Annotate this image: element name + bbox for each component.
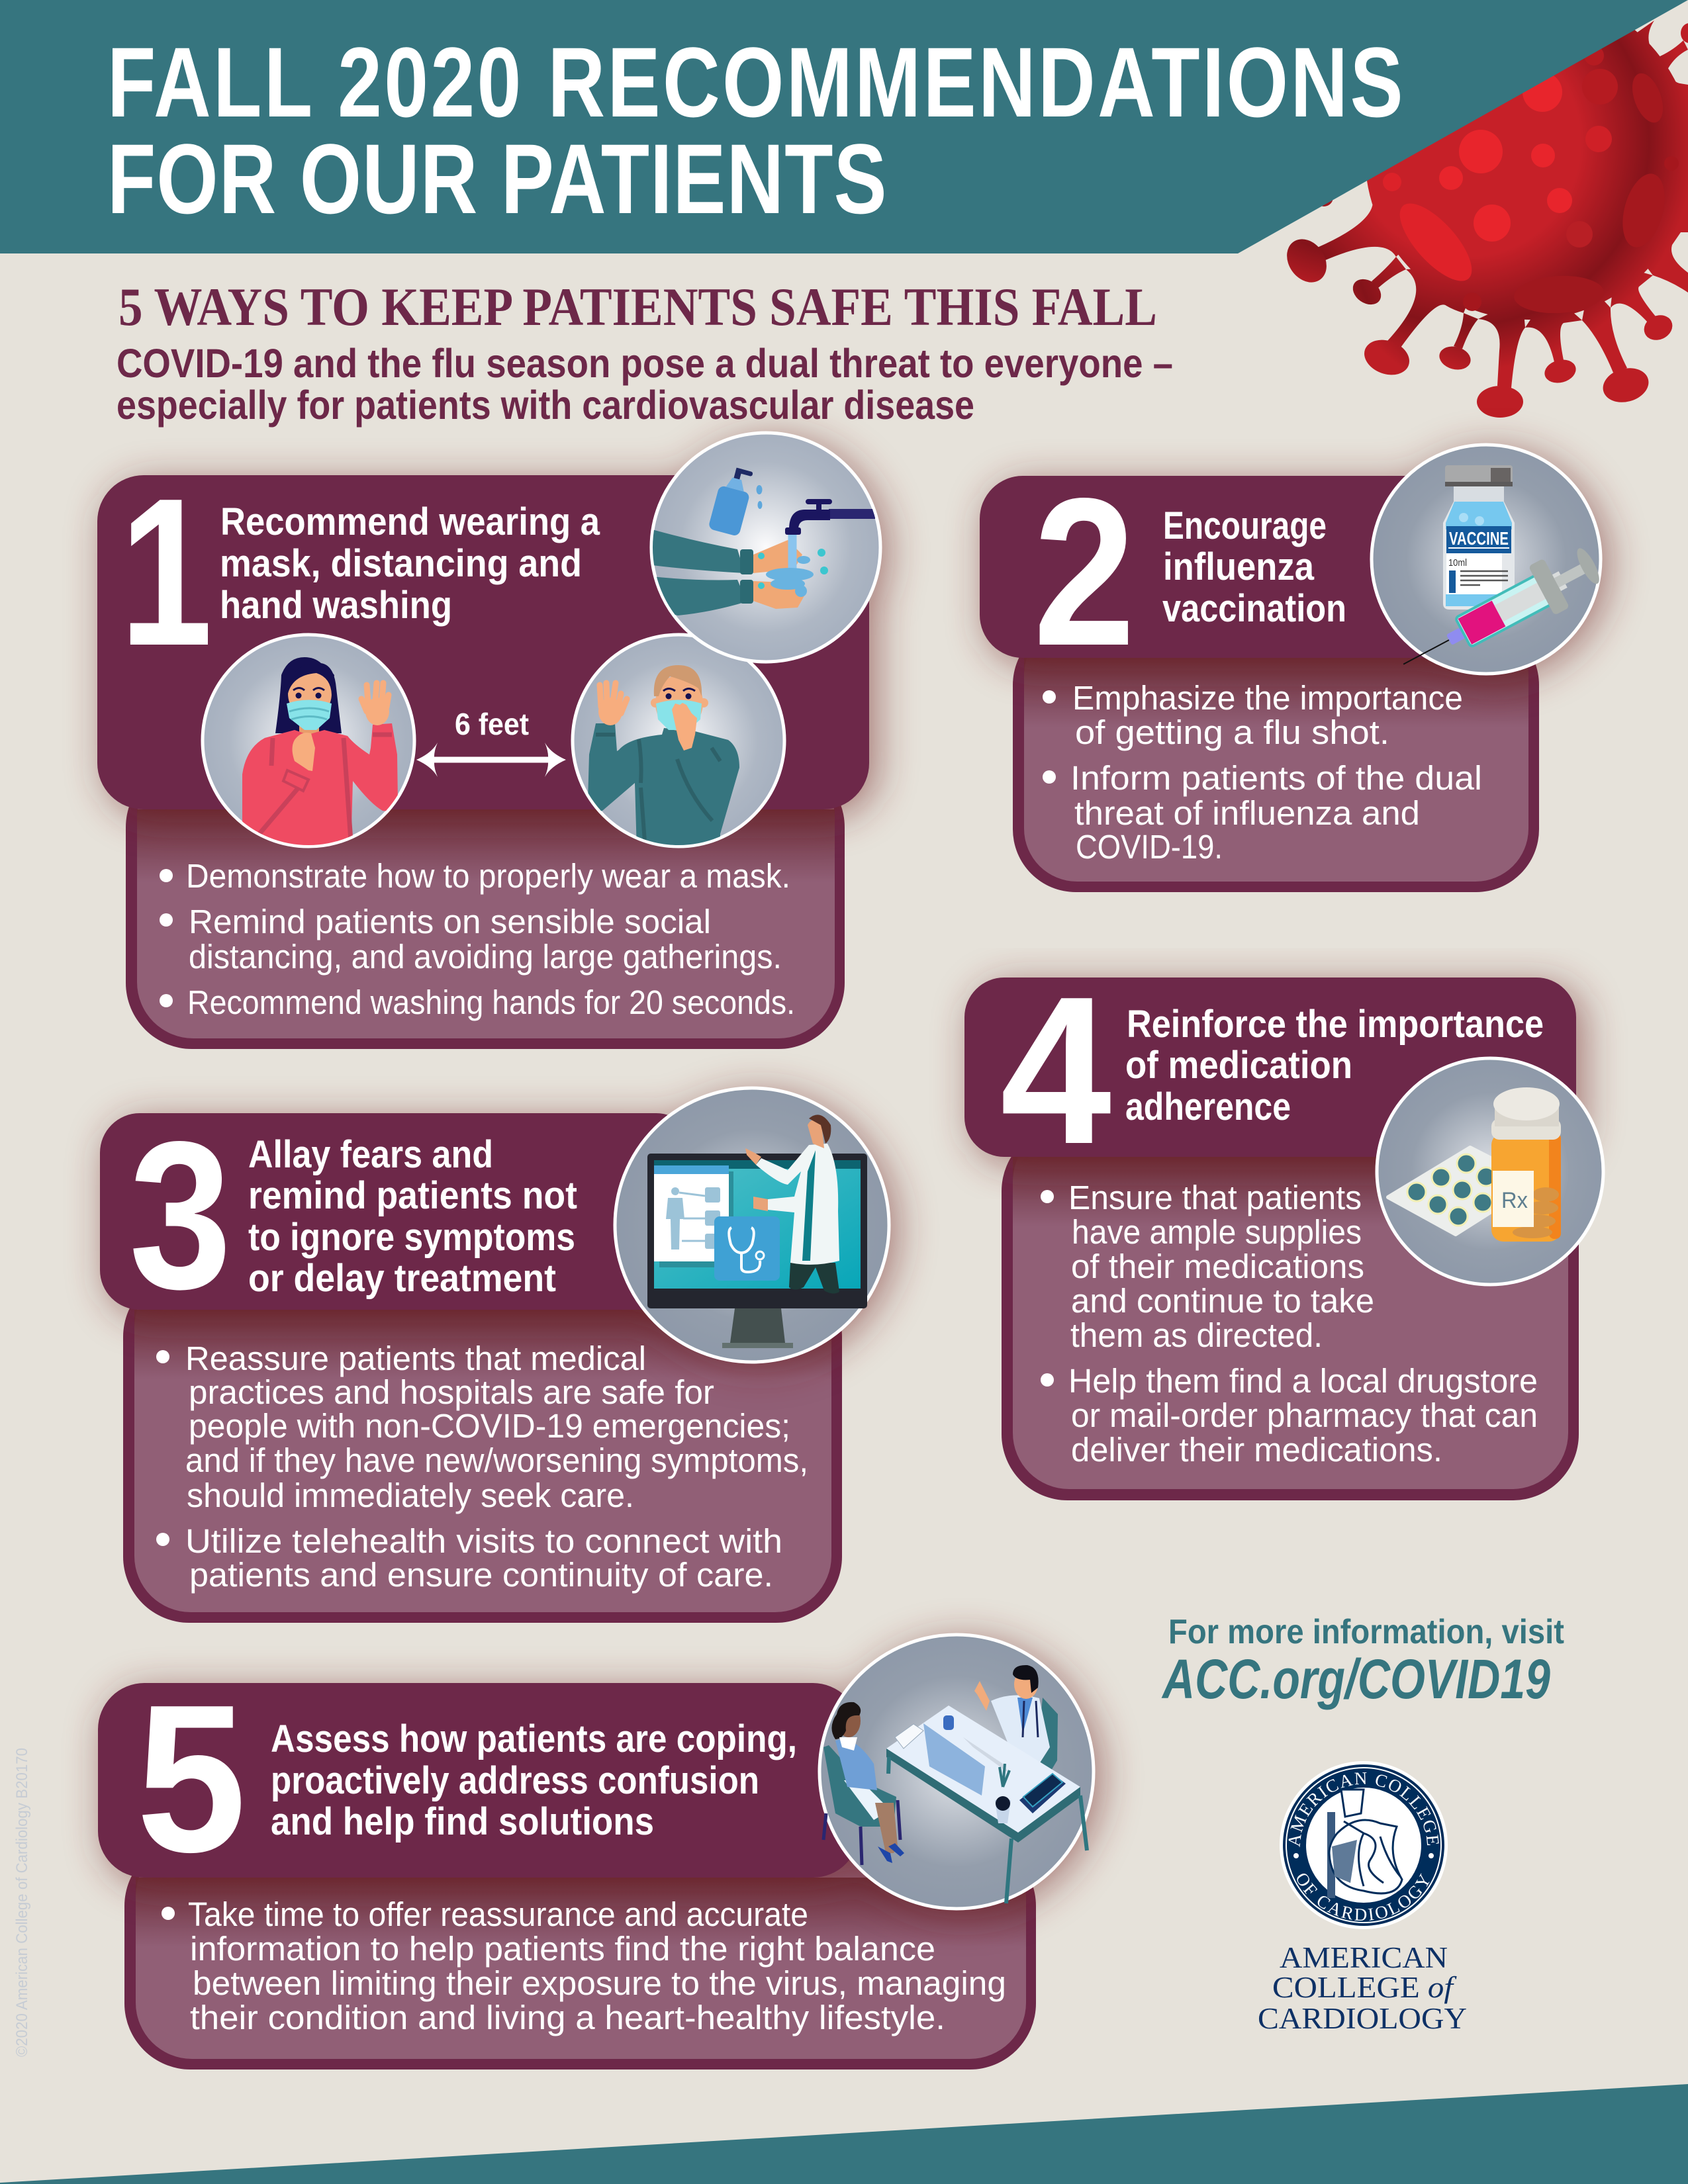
panel 5 heading: and help find solutions (271, 1800, 654, 1843)
panel 3 bullets (156, 1340, 808, 1594)
panel 4 bullets: deliver their medications. (1071, 1431, 1442, 1469)
panel 3 heading: Allay fears and (248, 1133, 493, 1176)
panel 4 header (964, 978, 1576, 1157)
intro text (117, 341, 1173, 428)
panel 3 shadow (107, 1093, 897, 1367)
panel 3 bullets: Reassure patients that medical (185, 1340, 646, 1377)
panel 4 heading (1125, 1003, 1544, 1128)
panel 5: coping (98, 1635, 1102, 2070)
icon: pills and prescription bottle (1377, 1058, 1603, 1285)
number 5: 5 (136, 1661, 246, 1896)
panel 2 heading: vaccination (1162, 587, 1346, 630)
panel 1 header (97, 475, 869, 809)
number 3: 3 (129, 1098, 232, 1333)
panel 2 heading: influenza (1163, 545, 1315, 588)
panel 3 heading (248, 1133, 577, 1300)
panel 3 bullets: practices and hospitals are safe for (189, 1373, 714, 1411)
panel 2 heading: Encourage (1163, 504, 1327, 547)
panel 5 heading: Assess how patients are coping, (271, 1717, 797, 1760)
panel 1 bullets: Remind patients on sensible social (189, 903, 711, 940)
icon: vaccine vial and syringe: 10ml (1448, 557, 1467, 569)
panel 5 body (124, 1840, 1036, 2070)
panel 3 bullets: Utilize telehealth visits to connect with (185, 1522, 782, 1560)
ACC seal logo (1280, 1761, 1448, 1929)
panel 2: influenza vaccination (980, 445, 1609, 892)
icon: doctor and monitor (615, 1088, 889, 1362)
icon: doctor consults patient (820, 1635, 1094, 1909)
panel 3 heading: or delay treatment (248, 1257, 556, 1300)
panel 5 shadow (105, 1640, 1102, 1914)
panel 3 header (100, 1113, 696, 1310)
panel 1 bullets: distancing, and avoiding large gatherings. (189, 938, 782, 976)
panel 2 header (980, 476, 1476, 658)
call to action: For more information, visit (1168, 1613, 1564, 1651)
panel 2 shadow (986, 450, 1609, 679)
panel 2 bullets: of getting a flu shot. (1075, 713, 1389, 751)
ACC seal logo: AMERICAN COLLEGE (1288, 1772, 1439, 1847)
panel 4 bullets (1041, 1179, 1538, 1469)
panel 1 bullets: Recommend washing hands for 20 seconds. (187, 983, 795, 1021)
panel 1 bullets (160, 857, 795, 1021)
icon: pills and prescription bottle: Rx (1501, 1188, 1528, 1213)
ACC wordmark (1258, 1941, 1467, 2035)
panel 2 bullets: COVID-19. (1076, 828, 1223, 866)
panel 5 bullet: information to help patients find the right balance (190, 1930, 935, 1968)
panel 1 body (126, 761, 845, 1049)
panel 2 heading (1162, 504, 1346, 630)
panel 2 bullets (1043, 679, 1482, 866)
arrow: 6 feet distance: 6 feet (455, 707, 529, 741)
panel 4 bullets: Help them find a local drugstore (1068, 1362, 1538, 1400)
ACC wordmark: AMERICAN (1280, 1941, 1448, 1974)
panel 4 bullets: and continue to take (1071, 1282, 1374, 1320)
panel 1 heading (220, 500, 600, 627)
panel 4 heading: adherence (1125, 1085, 1291, 1128)
panel 3 bullets: patients and ensure continuity of care. (189, 1556, 773, 1594)
illustration: coronavirus (1279, 0, 1688, 418)
panel 3: allay fears (100, 1088, 897, 1623)
icon: vaccine vial and syringe: VACCINE (1449, 528, 1509, 549)
section heading: 5 WAYS TO KEEP PATIENTS SAFE THIS FALL (118, 277, 1157, 337)
panel 1 bullets: Demonstrate how to properly wear a mask. (186, 857, 790, 895)
panel 5 bullet: their condition and living a heart-healthy lifestyle. (190, 1999, 945, 2036)
panel 4 body (1002, 1125, 1579, 1500)
panel 4 heading: Reinforce the importance (1127, 1003, 1544, 1046)
panel 3 body (123, 1271, 842, 1623)
number 4: 4 (1000, 953, 1113, 1188)
panel 1 shadow (105, 438, 888, 816)
panel 3 bullets: should immediately seek care. (187, 1477, 634, 1514)
panel 1: masks, distancing, hand washing (97, 433, 888, 1049)
panel 3 heading: remind patients not (248, 1174, 577, 1217)
panel 4 heading: of medication (1125, 1044, 1352, 1087)
panel 2 body (1013, 622, 1539, 892)
icon: man in mask (573, 635, 784, 850)
icon: hand washing (651, 433, 880, 662)
panel 4 bullets: Ensure that patients (1068, 1179, 1362, 1216)
call to action (1161, 1613, 1564, 1710)
panel 3 bullets: people with non-COVID-19 emergencies; (189, 1407, 790, 1445)
title: FALL 2020 RECOMMENDATIONS (107, 26, 1403, 138)
panel 5 bullet (162, 1895, 1006, 2036)
panel 2 bullets: Emphasize the importance (1072, 679, 1463, 717)
panel 5 bullet: Take time to offer reassurance and accurate (188, 1895, 808, 1933)
header banner (0, 0, 1688, 253)
panel 3 bullets: and if they have new/worsening symptoms, (185, 1441, 808, 1479)
panel 3 heading: to ignore symptoms (248, 1216, 575, 1259)
panel 5 header (98, 1683, 859, 1878)
panel 5 heading (271, 1717, 797, 1843)
number 2: 2 (1033, 455, 1135, 690)
call to action: ACC.org/COVID19 (1161, 1648, 1550, 1710)
icon: woman in mask (203, 635, 414, 850)
panel 1 heading: mask, distancing and (220, 542, 582, 585)
panel 5 bullet: between limiting their exposure to the virus, managing (193, 1964, 1006, 2002)
icon: vaccine vial and syringe (1372, 445, 1607, 689)
copyright: ©2020 American College of Cardiology B20170 (13, 1748, 31, 2057)
intro text: COVID-19 and the flu season pose a dual threat to everyone – (117, 341, 1173, 386)
panel 4 shadow (972, 984, 1584, 1163)
number 1: 1 (120, 455, 212, 690)
panel 4 bullets: have ample supplies (1072, 1213, 1362, 1251)
bottom banner (0, 2084, 1688, 2184)
panel 1 heading: hand washing (220, 584, 452, 627)
panel 2 bullets: Inform patients of the dual (1070, 759, 1482, 797)
title: FOR OUR PATIENTS (107, 123, 887, 234)
panel 1 heading: Recommend wearing a (220, 500, 600, 543)
ACC wordmark: CARDIOLOGY (1258, 2002, 1467, 2035)
panel 2 bullets: threat of influenza and (1074, 794, 1420, 832)
ACC seal logo: OF CARDIOLOGY (1297, 1873, 1430, 1921)
arrow: 6 feet distance (416, 707, 566, 777)
ACC wordmark: COLLEGE of (1272, 1971, 1457, 2004)
title (107, 26, 1403, 234)
panel 4 bullets: of their medications (1071, 1248, 1364, 1285)
panel 4: medication adherence (964, 953, 1603, 1500)
panel 4 bullets: or mail-order pharmacy that can (1071, 1396, 1538, 1434)
panel 5 heading: proactively address confusion (271, 1759, 759, 1802)
panel 4 bullets: them as directed. (1070, 1316, 1323, 1354)
intro text: especially for patients with cardiovascular disease (117, 383, 974, 428)
